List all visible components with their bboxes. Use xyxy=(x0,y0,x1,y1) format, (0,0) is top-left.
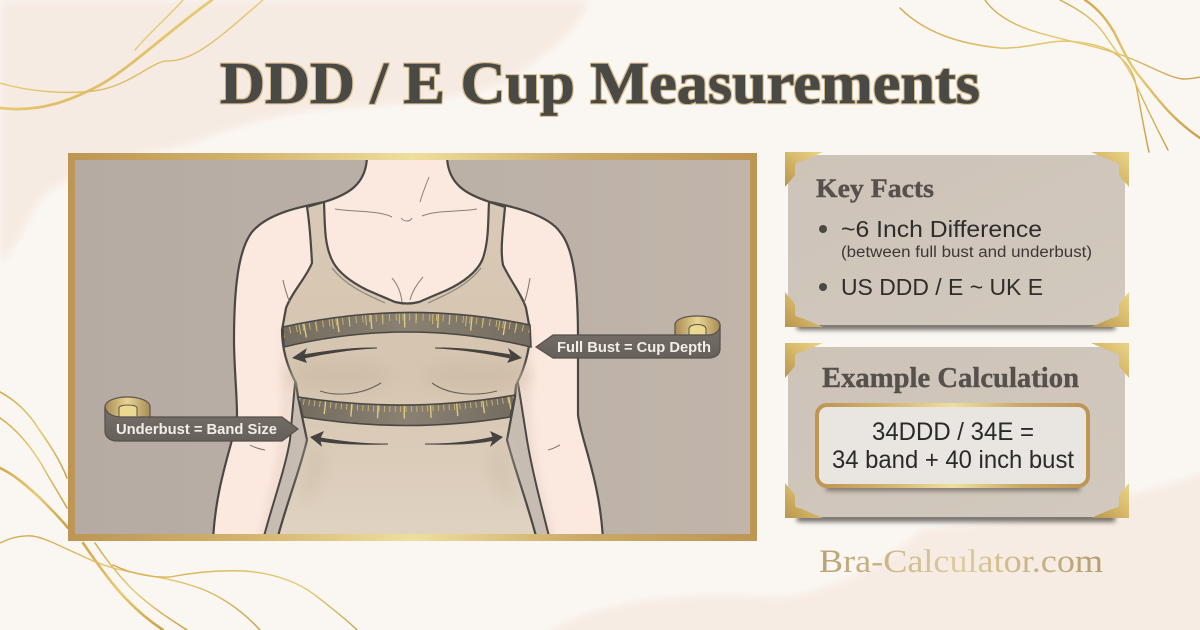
under-bust crease lines xyxy=(320,383,497,394)
body skin silhouette xyxy=(213,155,603,540)
heading: Example Calculation xyxy=(822,363,1079,394)
arrow: underbust left xyxy=(310,431,388,447)
fact: six inch difference xyxy=(819,216,1092,261)
gold foil curves: top right xyxy=(900,0,1200,152)
gold frame xyxy=(68,153,757,541)
illustration backdrop xyxy=(75,160,750,534)
gold foil curves: top left xyxy=(0,0,263,109)
label: underbust tape banner xyxy=(105,397,298,441)
armpit and elbow lines xyxy=(250,278,560,450)
panel card xyxy=(788,347,1125,517)
arrow: full bust right xyxy=(435,347,522,363)
gold corners xyxy=(785,343,1129,518)
arrow: underbust right xyxy=(425,431,503,447)
fact: size equivalence: US DDD / E ~ UK E xyxy=(841,274,1043,300)
bust shading xyxy=(286,361,355,396)
gold corners xyxy=(785,152,1129,327)
formula box xyxy=(817,405,1088,491)
pink arm shading xyxy=(261,354,552,534)
title: DDD / E Cup Measurements xyxy=(220,50,980,116)
tape roll icon xyxy=(675,316,720,340)
fact: six inch difference: ~6 Inch Difference xyxy=(841,216,1042,242)
collarbone and neck lines xyxy=(335,177,477,221)
measuring tape: full bust xyxy=(283,312,531,347)
grey side panels of garment xyxy=(263,383,550,540)
tape roll icon xyxy=(105,397,150,420)
measuring tape: underbust xyxy=(298,395,515,426)
fact: six inch difference: (between full bust and underbust) xyxy=(841,244,1092,261)
label: full bust tape banner: Full Bust = Cup Depth xyxy=(557,340,711,356)
panel: measurement illustration with gold frame xyxy=(68,153,757,541)
label: full bust tape banner xyxy=(536,316,720,358)
website credit: Bra-Calculator.com xyxy=(819,544,1103,580)
panel: key facts xyxy=(785,152,1129,330)
formula box: 34DDD / 34E = xyxy=(872,418,1034,446)
panel: example calculation xyxy=(785,343,1129,522)
panel card xyxy=(788,155,1125,325)
heading: Key Facts xyxy=(816,174,934,203)
panel shadow xyxy=(797,514,1115,522)
panel shadow xyxy=(797,322,1115,330)
label: underbust tape banner: Underbust = Band Size xyxy=(116,422,277,438)
formula box: 34 band + 40 inch bust xyxy=(832,446,1074,474)
neckline echo and cleavage lines xyxy=(332,268,481,303)
arrow: full bust left xyxy=(292,347,377,363)
waist shading xyxy=(300,440,515,505)
gold foil curves: bottom left xyxy=(0,392,357,630)
figure in bra xyxy=(213,155,603,540)
garment torso and cups xyxy=(277,202,537,540)
